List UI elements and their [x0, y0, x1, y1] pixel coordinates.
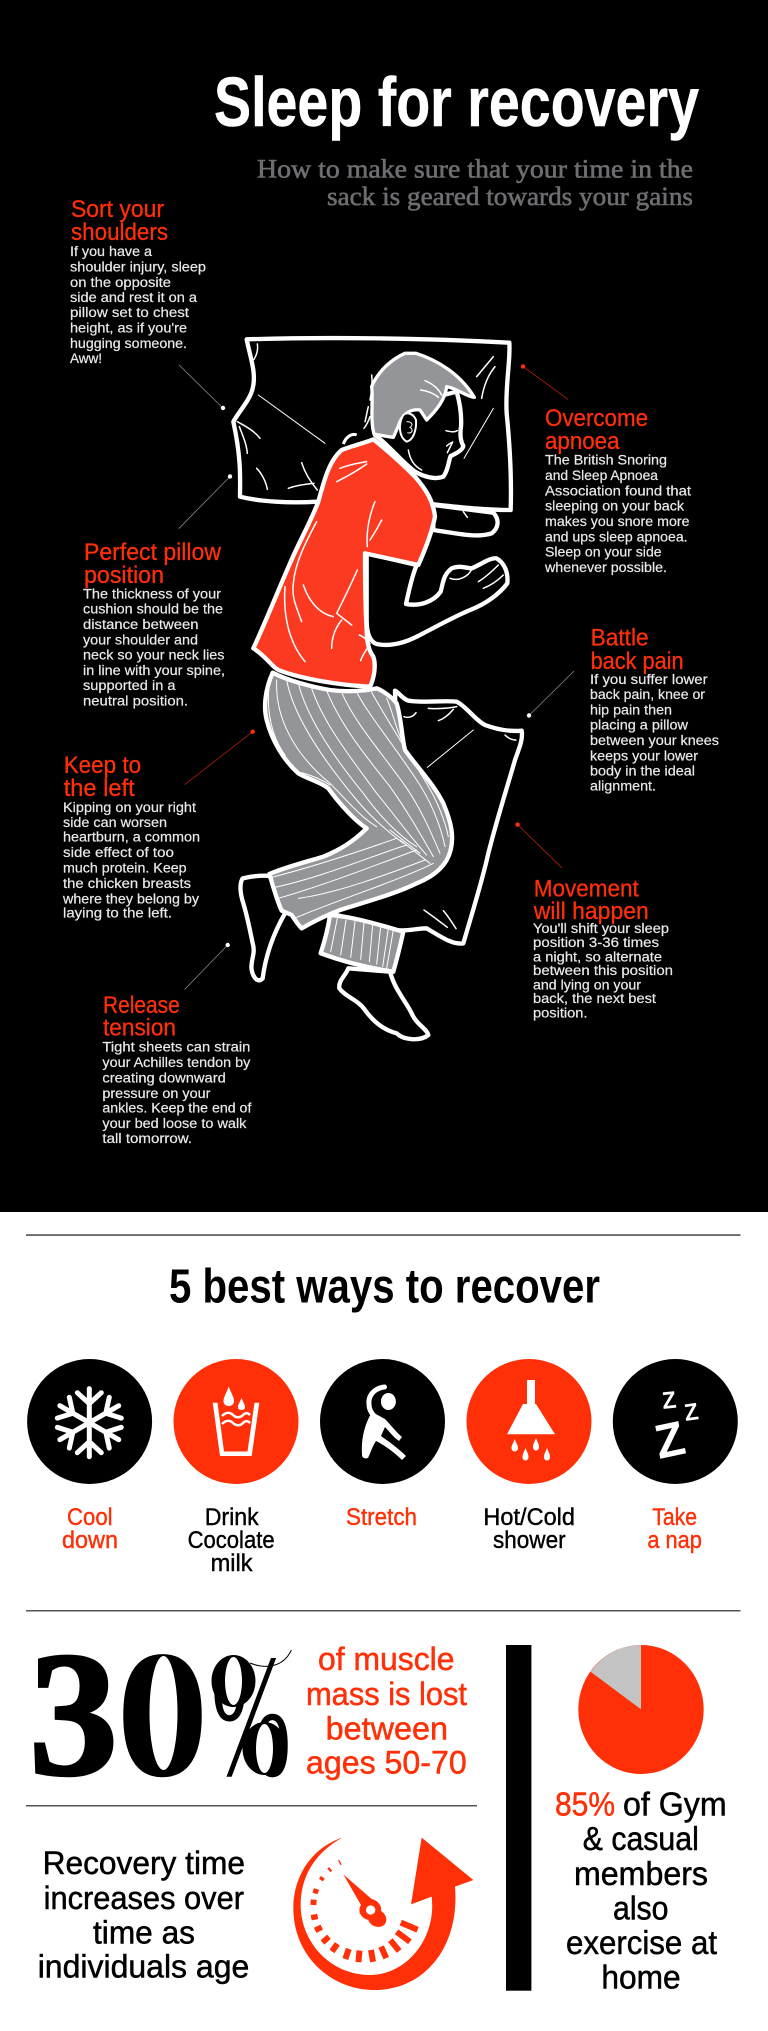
recovery text: time as — [93, 1914, 195, 1950]
body text: The thickness of your — [83, 587, 222, 602]
heading: Overcome — [545, 405, 648, 432]
body text: side can worsen — [63, 815, 167, 830]
heading: Release — [103, 992, 180, 1019]
recovery text: increases over — [44, 1880, 244, 1916]
body text: If you suffer lower — [590, 672, 708, 687]
callout: movement will happen — [515, 822, 673, 1021]
pointer — [179, 365, 225, 410]
body text: your shoulder and — [83, 632, 198, 647]
icon: snowflake — [27, 1359, 152, 1484]
body text: supported in a — [83, 678, 176, 693]
item: take a nap — [613, 1359, 738, 1554]
body text: your Achilles tendon by — [102, 1055, 251, 1070]
rear foot — [240, 876, 285, 980]
stat description: of Gym — [623, 1786, 727, 1823]
heading: Battle — [591, 624, 649, 652]
heading: will happen — [533, 898, 649, 925]
divider bar — [506, 1645, 531, 1991]
stat description — [555, 1786, 727, 1995]
heading: Sort your — [71, 196, 164, 223]
heading — [591, 624, 684, 675]
subtitle — [257, 154, 693, 211]
subtitle: sack is geared towards your gains — [327, 182, 693, 211]
body text — [533, 921, 673, 1021]
trousers — [265, 673, 452, 928]
body text: If you have a — [70, 244, 153, 259]
body text — [102, 1040, 252, 1146]
body text: hugging someone. — [70, 336, 187, 351]
body text: a night, so alternate — [533, 949, 662, 964]
label — [647, 1504, 702, 1554]
body text: neutral position. — [83, 694, 188, 709]
recovery text: individuals age — [38, 1949, 249, 1985]
pillow under head — [233, 338, 511, 535]
trouser cuff — [321, 915, 403, 972]
body text: placing a pillow — [590, 718, 688, 733]
callout: release tension — [102, 943, 252, 1146]
illustration: sleeping man upper body and head pillow — [233, 338, 511, 687]
icon: glass — [174, 1359, 298, 1484]
icon: gauge with arrow — [293, 1838, 473, 1990]
callout: perfect pillow position — [83, 474, 232, 709]
body text: makes you snore more — [545, 514, 690, 529]
pie chart — [578, 1645, 704, 1774]
stat description: ages 50-70 — [306, 1744, 467, 1780]
heading: the left — [64, 775, 135, 802]
item: cool down — [27, 1359, 152, 1554]
body text: tall tomorrow. — [102, 1131, 192, 1146]
stat description: also — [613, 1889, 668, 1926]
label: milk — [211, 1550, 254, 1577]
stat description: of muscle — [318, 1641, 454, 1677]
pointer — [527, 671, 574, 718]
body text: the chicken breasts — [63, 876, 191, 891]
stat description: between — [326, 1710, 448, 1746]
body text — [83, 587, 225, 709]
heading: Movement — [534, 876, 639, 903]
body text: hip pain then — [590, 702, 672, 717]
arm and hand — [367, 553, 508, 645]
body text: back pain, knee or — [590, 687, 706, 702]
label: Cocolate — [188, 1527, 275, 1554]
stat: recovery time — [38, 1838, 473, 1990]
body text: Aww! — [70, 351, 102, 366]
icon: zzz: Z — [661, 1387, 678, 1415]
head: hair — [364, 353, 474, 442]
body text: Sleep on your side — [545, 544, 662, 559]
body text: between your knees — [590, 733, 719, 748]
pointer — [179, 474, 232, 529]
pointer — [185, 730, 255, 785]
label: Take — [652, 1504, 697, 1531]
heading: back pain — [591, 648, 684, 675]
label: a nap — [647, 1527, 702, 1554]
heading — [64, 752, 141, 802]
heading: tension — [103, 1015, 176, 1042]
stat description: mass is lost — [306, 1676, 467, 1712]
label: down — [62, 1527, 118, 1554]
callout: overcome apnoea — [521, 364, 691, 575]
shirt — [253, 434, 435, 687]
body text: alignment. — [590, 779, 656, 794]
body text: cushion should be the — [83, 602, 223, 617]
stat description: members — [574, 1855, 708, 1892]
panel: sleep position — [0, 0, 768, 1212]
pointer — [521, 364, 568, 399]
body text: Kipping on your right — [63, 800, 196, 815]
label: shower — [493, 1527, 566, 1554]
body text — [70, 244, 206, 366]
stat description — [306, 1641, 467, 1780]
subtitle: How to make sure that your time in the — [257, 154, 693, 184]
body text: You'll shift your sleep — [533, 921, 669, 936]
body text: pillow set to chest — [70, 305, 189, 320]
heading — [71, 196, 168, 246]
head: face — [375, 392, 463, 478]
body text: much protein. Keep — [63, 860, 187, 875]
body text: whenever possible. — [544, 560, 667, 575]
body text: distance between — [83, 617, 198, 632]
body text: on the opposite — [70, 275, 171, 290]
heading — [103, 992, 180, 1042]
pointer — [515, 822, 562, 868]
body text: height, as if you're — [70, 320, 187, 336]
label: Drink — [205, 1504, 260, 1531]
body text: neck so your neck lies — [83, 648, 225, 663]
illustration: sleeping man legs and knee pillow — [240, 673, 522, 1039]
body text: laying to the left. — [63, 906, 172, 920]
label — [62, 1504, 118, 1554]
icon: stretching figure — [320, 1359, 445, 1484]
body text: sleeping on your back — [545, 498, 684, 514]
heading — [533, 876, 649, 925]
body text: side effect of too — [63, 845, 174, 860]
label: Hot/Cold — [483, 1504, 575, 1531]
body text: Association found that — [545, 483, 691, 498]
stat description: home — [601, 1958, 681, 1995]
recovery text — [38, 1845, 249, 1985]
heading: shoulders — [71, 219, 168, 246]
label: Cool — [67, 1504, 113, 1531]
item: hot/cold shower — [466, 1359, 592, 1554]
stat description: 85% — [555, 1786, 615, 1823]
stat: 30 percent muscle mass — [29, 1615, 467, 1814]
icon: shower — [466, 1359, 592, 1484]
body text: The British Snoring — [545, 453, 667, 468]
body text: pressure on your — [102, 1086, 211, 1101]
body text: between this position — [533, 963, 673, 978]
body text: body in the ideal — [590, 764, 695, 779]
heading — [545, 405, 648, 455]
body text: where they belong by — [62, 891, 199, 906]
body text: and Sleep Apnoea — [545, 468, 658, 483]
heading: position — [84, 562, 164, 589]
body text — [544, 453, 691, 575]
front foot — [339, 968, 428, 1039]
pointer — [185, 943, 230, 990]
item: drink chocolate milk — [174, 1359, 298, 1577]
icon: zzz: Z — [650, 1412, 690, 1470]
big number — [29, 1615, 291, 1814]
body text: ankles. Keep the end of — [102, 1100, 252, 1116]
body text: side and rest it on a — [70, 290, 198, 305]
callout: keep to the left — [62, 730, 255, 920]
body text: Tight sheets can strain — [102, 1040, 250, 1055]
icon: zzz — [613, 1359, 738, 1484]
label — [188, 1504, 275, 1577]
heading: Keep to — [64, 752, 141, 779]
body text: your bed loose to walk — [102, 1116, 247, 1131]
body text — [62, 800, 200, 920]
label — [483, 1504, 575, 1554]
stat: 85 percent gym members — [555, 1645, 727, 1995]
body text: position 3-36 times — [533, 935, 659, 950]
body text: creating downward — [102, 1070, 226, 1085]
body text: keeps your lower — [590, 748, 699, 764]
knee pillow — [330, 691, 522, 944]
callout: sort your shoulders — [70, 196, 225, 410]
body text: shoulder injury, sleep — [70, 260, 206, 275]
body text: in line with your spine, — [83, 663, 225, 678]
body text: and lying on your — [533, 978, 642, 992]
heading — [84, 539, 222, 589]
body text: position. — [533, 1006, 588, 1021]
stat description: exercise at — [566, 1924, 717, 1961]
body text — [590, 672, 719, 794]
body text: heartburn, a common — [63, 830, 200, 845]
recovery text: Recovery time — [43, 1845, 245, 1881]
label: Stretch — [346, 1504, 417, 1531]
stat description: & casual — [583, 1820, 699, 1857]
heading: Perfect pillow — [84, 539, 222, 566]
body text: back, the next best — [533, 991, 656, 1006]
callout: battle back pain — [527, 624, 719, 794]
body text: and ups sleep apnoea. — [545, 529, 688, 544]
heading: 5 best ways to recover: 5 best ways to recover — [169, 1261, 600, 1314]
icon: zzz: Z — [683, 1398, 700, 1427]
heading: apnoea — [545, 428, 620, 455]
item: stretch — [320, 1359, 445, 1531]
big number: 30 — [29, 1615, 207, 1813]
big number: % — [211, 1619, 291, 1814]
